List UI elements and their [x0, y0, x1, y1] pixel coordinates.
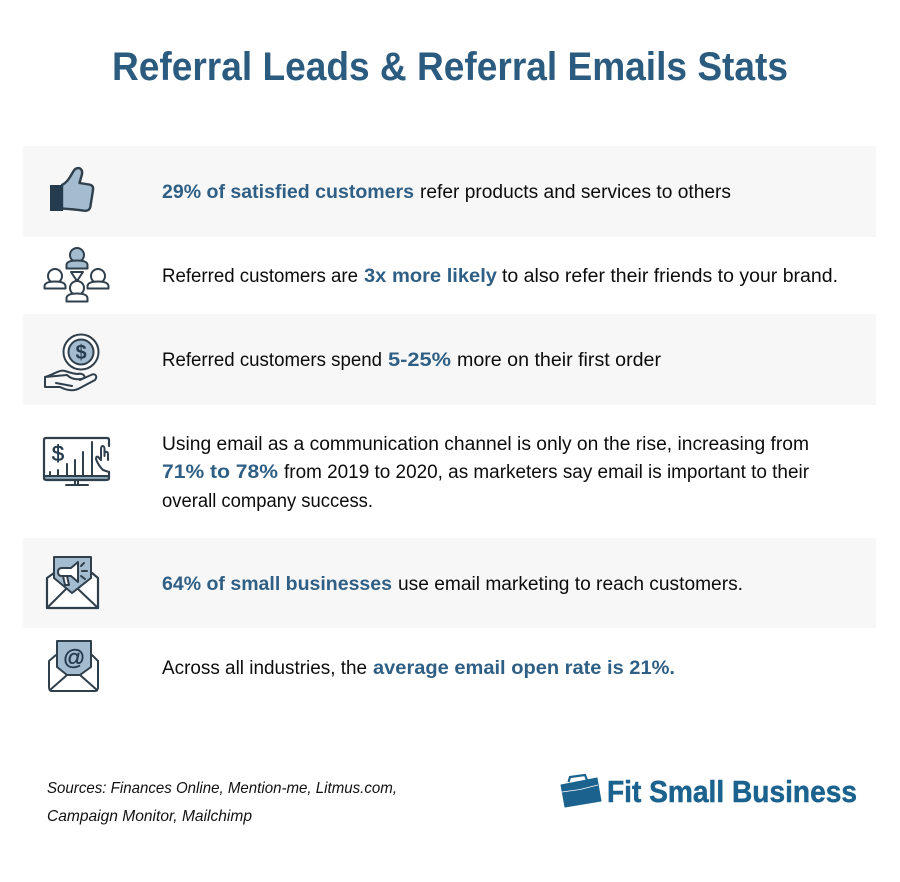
icon: envelope with at sign: @ — [63, 645, 85, 670]
stat text: 29% of satisfied customers: 29% of satisfied customers — [162, 182, 414, 203]
row: email channel growth — [44, 434, 810, 512]
stat text: 71% to 78%: 71% to 78% — [162, 462, 278, 483]
row: referred customers refer friends — [44, 248, 838, 302]
stat text: 64% of small businesses: 64% of small businesses — [162, 574, 392, 595]
row: average open rate — [49, 641, 675, 691]
stat text: average email open rate: average email open rate is 21%. — [373, 658, 675, 679]
icon: thumbs up — [50, 168, 93, 211]
title: Referral Leads & Referral Emails Stats — [112, 45, 788, 89]
panel: first order spend — [23, 314, 876, 405]
stat text: average email open rate: Across all industries, the — [162, 658, 367, 679]
stat text: 5-25%: Referred customers spend — [162, 350, 382, 371]
stat text: 3x more likely: 3x more likely — [364, 266, 497, 287]
stat text: 71% to 78%: Using email as a communication channel is only on the rise, increasing from — [162, 434, 809, 455]
icon: envelope with megaphone — [47, 557, 98, 608]
icon: hand holding dollar coin: $ — [75, 342, 87, 364]
icon: group of people — [44, 248, 108, 302]
stat text: 29% of satisfied customers — [162, 182, 731, 203]
stat text: 3x more likely: to also refer their friends to your brand. — [502, 266, 838, 287]
stat text: 64% of small businesses: use email marketing to reach customers. — [398, 574, 743, 595]
stat text: 5-25% — [162, 350, 662, 371]
stat text: 71% to 78%: from 2019 to 2020, as marketers say email is important to their — [284, 462, 810, 483]
stat text: 5-25%: 5-25% — [388, 350, 451, 371]
stat text: average email open rate — [162, 658, 675, 679]
icon: monitor with chart and hand — [44, 438, 109, 485]
icon: monitor with chart and hand: $ — [52, 441, 64, 466]
icon: envelope with at sign — [49, 641, 98, 691]
stat text: 71% to 78%: overall company success. — [162, 491, 373, 512]
stat text: 3x more likely — [162, 266, 838, 287]
stat text: 64% of small businesses — [162, 574, 743, 595]
stat text: 3x more likely: Referred customers are — [162, 266, 358, 287]
sources: Campaign Monitor, Mailchimp — [47, 808, 252, 825]
stat text: 5-25%: more on their first order — [457, 350, 662, 371]
stat text: 71% to 78% — [162, 434, 810, 512]
logo: Fit Small Business: Fit Small Business — [607, 774, 857, 809]
icon: briefcase — [561, 775, 601, 807]
panel: satisfied customers — [23, 146, 876, 237]
sources — [47, 780, 397, 825]
icon: hand holding dollar coin — [45, 334, 98, 390]
sources: Sources: Finances Online, Mention-me, Litmus.com, — [47, 780, 397, 797]
stat text: 29% of satisfied customers: refer products and services to others — [420, 182, 731, 203]
panel: small business email marketing — [23, 538, 876, 628]
